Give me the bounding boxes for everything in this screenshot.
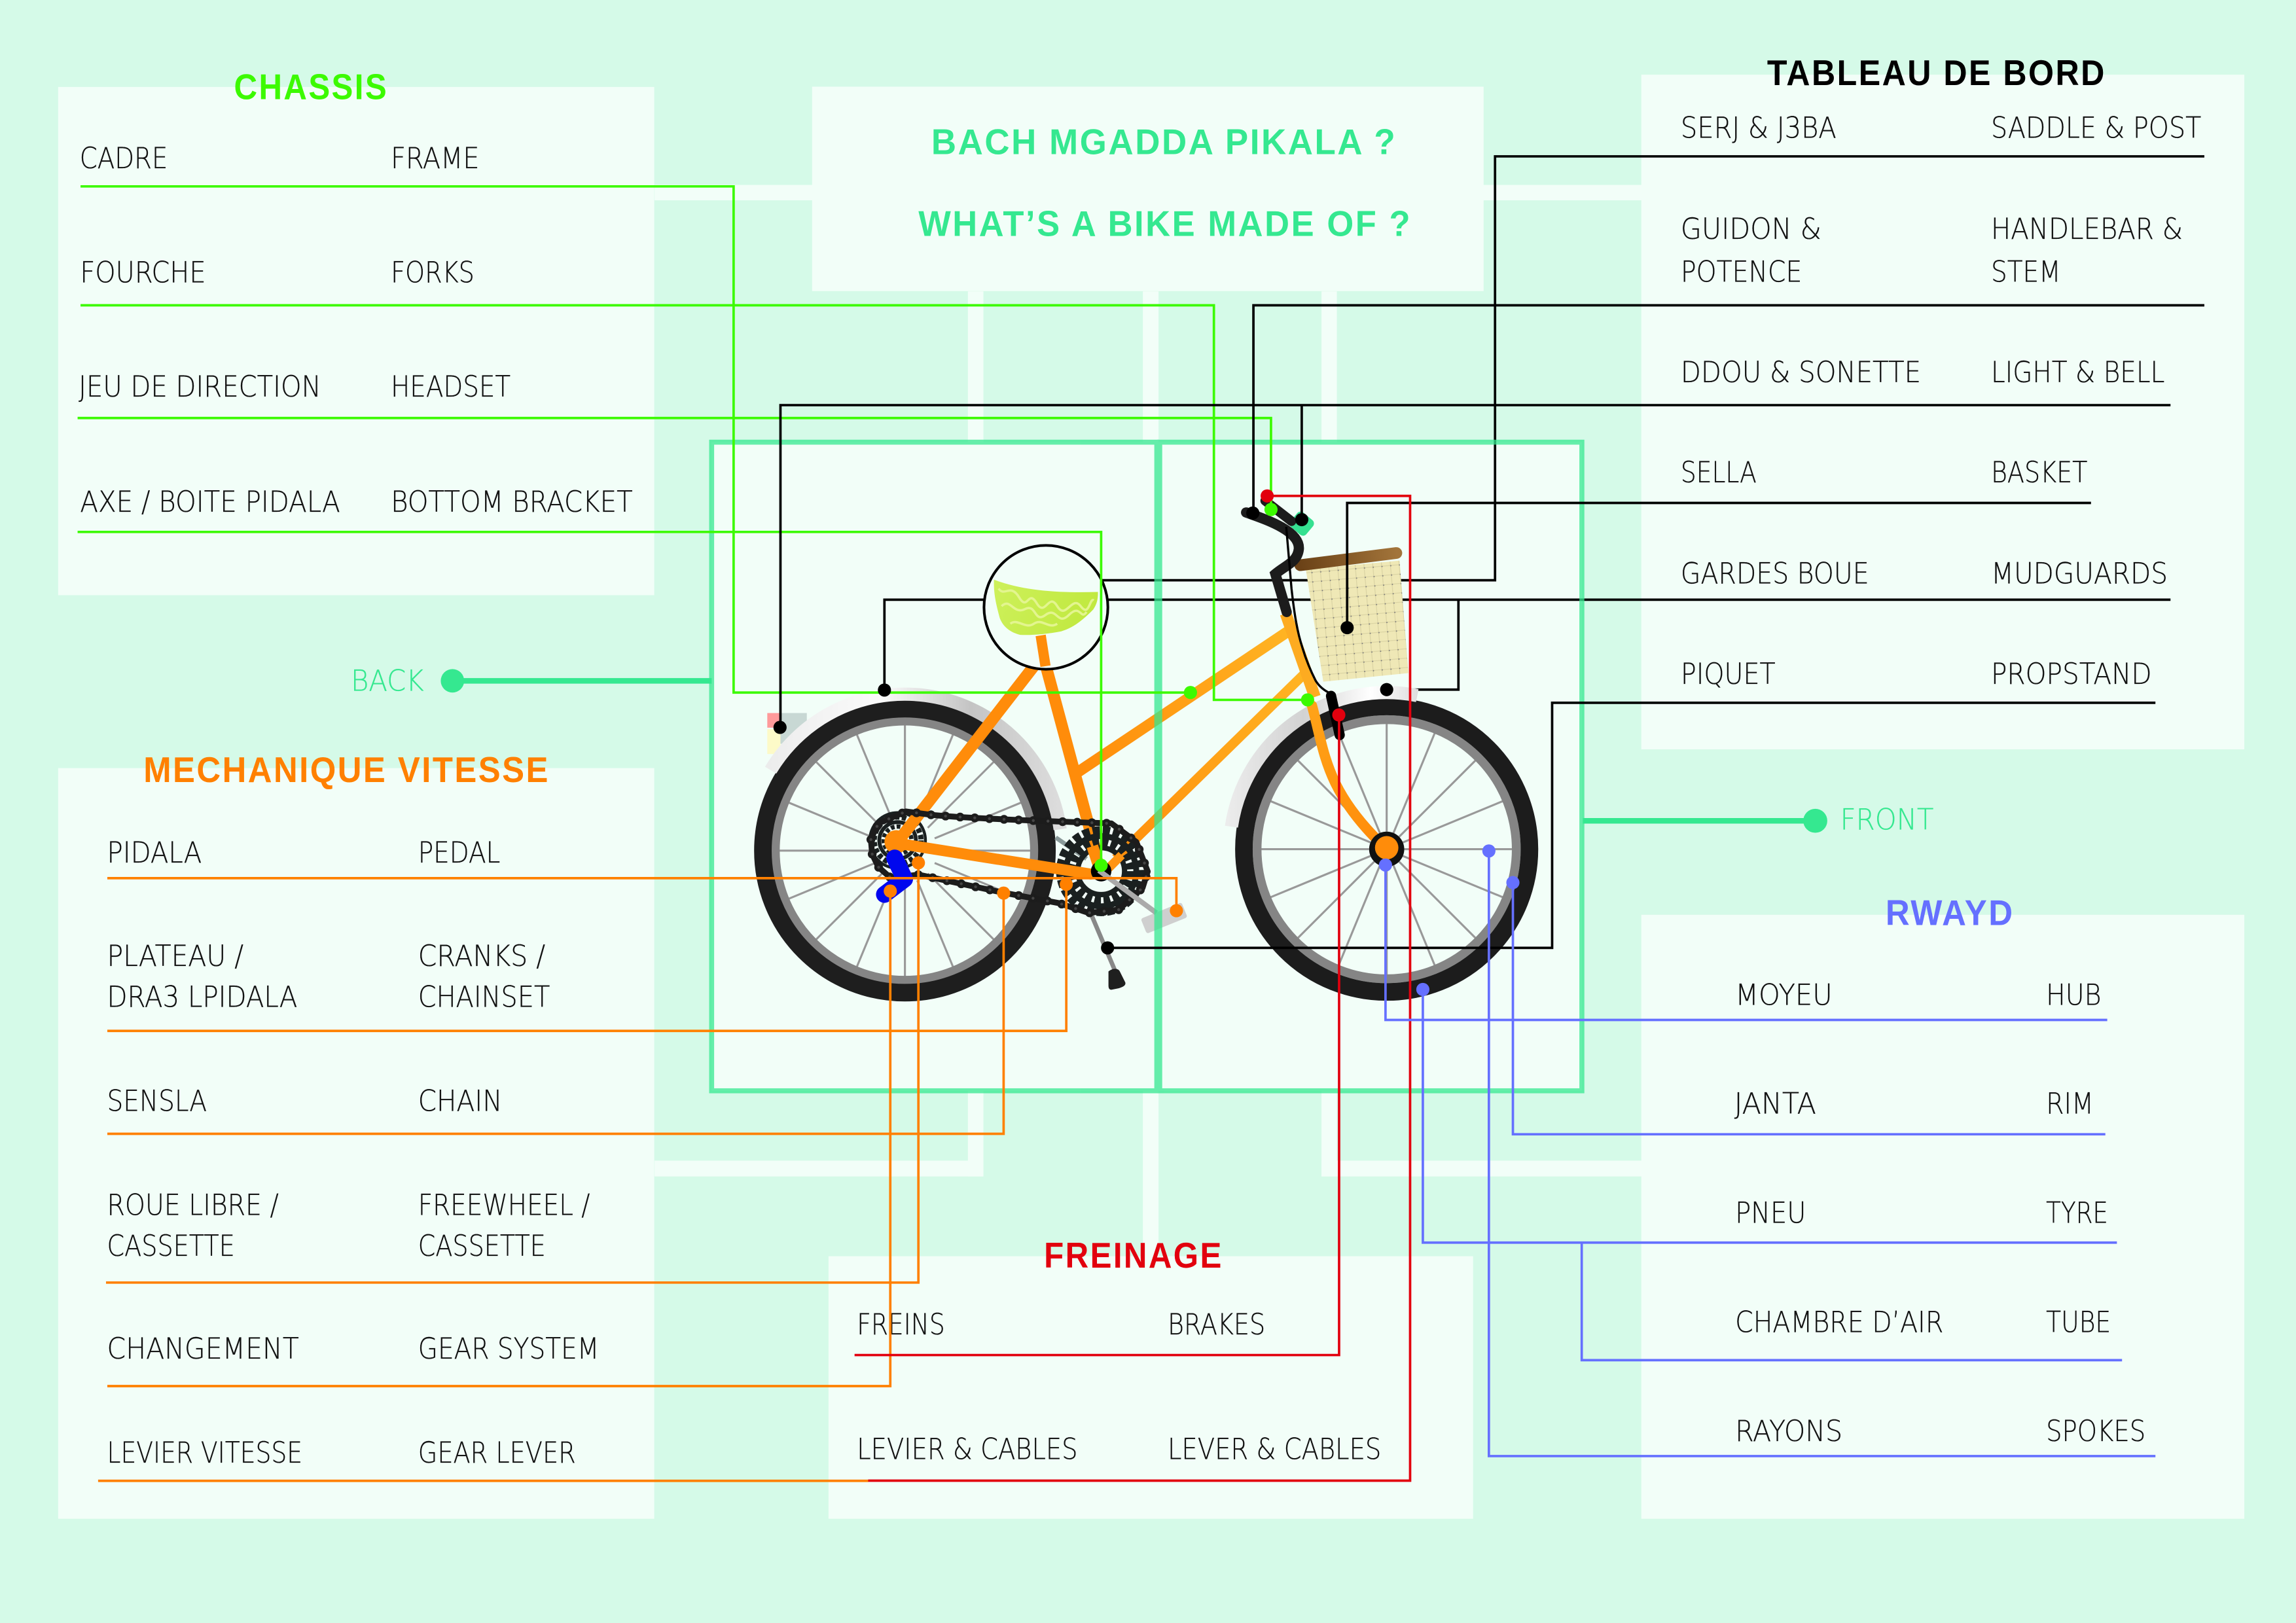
back label with connector [351,664,711,698]
heading: tableau de bord: TABLEAU DE BORD [1767,52,2106,93]
tableau de bord word list [1681,111,2201,691]
mechanique vitesse word list: CHANGEMENT [107,1331,299,1366]
frame background: back and front of bike [711,442,1582,1091]
panel: freinage [829,1235,1473,1519]
rear mudguard [770,694,1060,829]
chassis word list: CADRE [80,141,168,175]
rwayd word list: RAYONS [1735,1414,1842,1448]
rear cassette [870,813,925,868]
tableau de bord word list: DDOU & SONETTE [1681,355,1921,389]
front hub [1369,832,1405,866]
rear light [767,713,807,754]
rwayd word list [1734,977,2145,1448]
rwayd word list: CHAMBRE D’AIR [1735,1305,1943,1340]
mechanique vitesse word list: GEAR LEVER [418,1435,576,1470]
leaders: tableau de bord (black) [774,305,2204,954]
bottom bracket opening [1083,846,1122,888]
chassis word list: FRAME [391,141,479,175]
title line: darija: BACH MGADDA PIKALA ? [931,122,1397,162]
leaders: chassis (green) [78,187,1314,872]
front wheel [1244,706,1530,992]
saddle circle [984,545,1108,669]
mechanique vitesse word list: SENSLA [107,1084,207,1118]
tableau de bord word list: BASKET [1991,455,2087,490]
front label with connector [1583,802,1934,836]
heading: rwayd: RWAYD [1886,892,2015,933]
tableau de bord word list: MUDGUARDS [1991,556,2168,590]
rwayd word list: HUB [2046,977,2101,1012]
tableau de bord word list: LIGHT & BELL [1991,355,2164,389]
mechanique vitesse word list: FREEWHEEL / [418,1187,590,1222]
panel: rwayd [1641,892,2244,1519]
chassis word list: JEU DE DIRECTION [79,369,321,404]
mechanique vitesse word list: CASSETTE [418,1228,546,1263]
leaders: freinage (red) [855,490,1410,1481]
tableau de bord word list: POTENCE [1681,254,1802,289]
cranks and pedal [1056,838,1187,990]
heading: chassis: CHASSIS [234,66,388,107]
bike frame tubes [884,613,1385,872]
mechanique vitesse word list: PEDAL [418,835,500,870]
panel: mechanique vitesse [58,749,655,1519]
saddle [994,580,1098,635]
freinage word list: LEVER & CABLES [1168,1432,1381,1467]
chassis word list: HEADSET [391,369,511,404]
mechanique vitesse word list: CHAINSET [418,980,550,1014]
rwayd word list: MOYEU [1735,977,1833,1012]
freinage word list: LEVIER & CABLES [857,1432,1078,1467]
rwayd word list: PNEU [1735,1196,1806,1230]
mechanique vitesse word list: CRANKS / [418,938,545,973]
freinage word list: BRAKES [1168,1307,1265,1342]
handlebar and stem [1246,501,1340,735]
rwayd word list: SPOKES [2046,1414,2145,1448]
heading: mechanique vitesse: MECHANIQUE VITESSE [143,749,550,790]
mechanique vitesse word list: CHAIN [418,1084,503,1118]
mechanique vitesse word list: PIDALA [107,835,202,870]
chain and front chainring [870,812,1148,913]
panel: title [812,86,1484,291]
tableau de bord word list: PIQUET [1681,656,1776,691]
mechanique vitesse word list: ROUE LIBRE / [107,1187,279,1222]
panel: tableau de bord [1641,52,2244,749]
tableau de bord word list: SADDLE & POST [1991,111,2201,145]
bottom bracket axle and crank [1091,861,1157,913]
tableau de bord word list: STEM [1991,254,2061,289]
tableau de bord word list: SELLA [1681,455,1757,490]
rwayd word list: TYRE [2046,1196,2108,1230]
rear wheel [763,709,1047,993]
freinage word list: FREINS [857,1307,945,1342]
tableau de bord word list: SERJ & J3BA [1681,111,1837,145]
leaders: rwayd (blue) [1379,844,2155,1456]
back label with connector: BACK [351,664,424,698]
background connecting strips [655,185,1641,1258]
chassis word list [79,141,633,519]
mechanique vitesse word list: CASSETTE [107,1228,235,1263]
leaders: mechanique vitesse (orange) [98,856,1183,1481]
front label with connector: FRONT [1840,802,1934,836]
tableau de bord word list: HANDLEBAR & [1991,211,2183,246]
freinage word list [857,1307,1381,1467]
front mudguard [1232,692,1417,827]
tableau de bord word list: GUIDON & [1681,211,1821,246]
mechanique vitesse word list: DRA3 LPIDALA [107,980,297,1014]
bicycle illustration [763,501,1530,993]
leaders under bike: saddle and mudguards [884,156,2204,690]
rwayd word list: JANTA [1734,1086,1816,1121]
rwayd word list: RIM [2046,1086,2094,1121]
chassis word list: FOURCHE [80,255,206,290]
basket [1300,553,1408,682]
panel: chassis [58,66,655,595]
tableau de bord word list: PROPSTAND [1991,656,2152,691]
derailleur [884,858,905,895]
rwayd word list: TUBE [2046,1305,2111,1340]
heading: freinage: FREINAGE [1044,1235,1223,1275]
chassis word list: AXE / BOITE PIDALA [80,484,340,519]
chain stay [897,844,1091,874]
tableau de bord word list: GARDES BOUE [1681,556,1869,590]
mechanique vitesse word list [107,835,599,1470]
seat post [1041,635,1045,666]
mechanique vitesse word list: GEAR SYSTEM [418,1331,599,1366]
chassis word list: FORKS [391,255,475,290]
chassis word list: BOTTOM BRACKET [391,484,633,519]
mechanique vitesse word list: LEVIER VITESSE [107,1435,302,1470]
mechanique vitesse word list: PLATEAU / [107,938,243,973]
bike frame outlines: back and front [711,442,1582,1091]
title line: english: WHAT’S A BIKE MADE OF ? [918,204,1412,244]
